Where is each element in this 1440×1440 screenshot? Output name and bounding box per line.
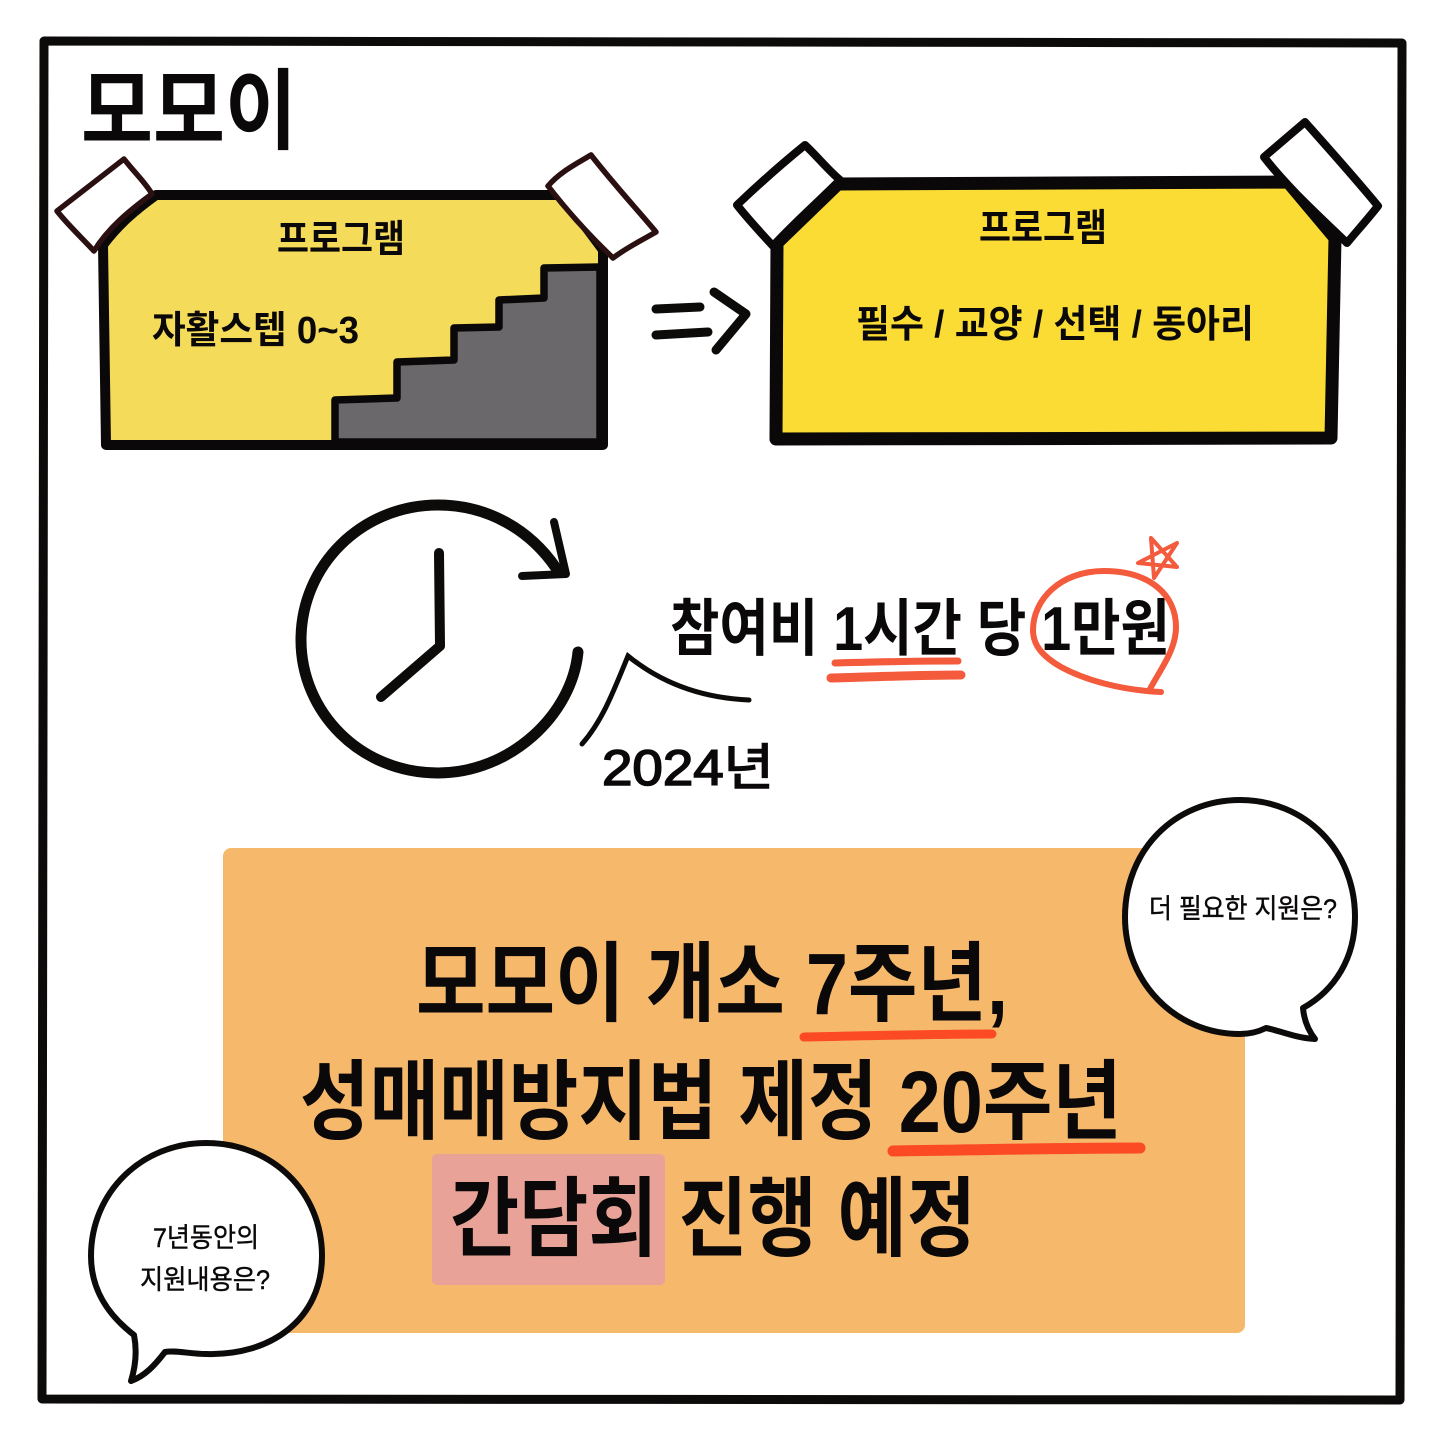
panel: program before — [57, 155, 656, 445]
headline line 3: 간담회 진행 예정 — [450, 1171, 976, 1268]
yellow note — [103, 195, 603, 445]
text: year 2024: 2024년 — [602, 740, 774, 796]
highlight: meeting — [432, 1154, 665, 1285]
text: self-support steps: 자활스텝 0~3 — [152, 310, 359, 352]
headline underlines — [804, 1034, 1140, 1151]
title: 모모이 — [81, 62, 297, 161]
heading: program: 프로그램 — [979, 208, 1107, 250]
callout line to year — [582, 656, 749, 744]
text: fee: 참여비 1시간 당 1만원 — [670, 595, 1170, 664]
text: categories: 필수 / 교양 / 선택 / 동아리 — [856, 304, 1254, 346]
headline — [300, 936, 1122, 1268]
fee emphasis marks — [831, 538, 1177, 692]
stairs — [335, 267, 600, 442]
icon: clock with arrow — [301, 505, 578, 773]
tape right — [548, 155, 656, 258]
bubble text: 7년동안의 — [153, 1223, 259, 1253]
speech bubble: top right — [1125, 800, 1355, 1039]
heading: program: 프로그램 — [277, 219, 405, 261]
headline line 2: 성매매방지법 제정 20주년 — [300, 1054, 1122, 1151]
tape left — [57, 159, 152, 251]
tape left — [737, 145, 840, 246]
panel: anniversary banner — [223, 848, 1245, 1333]
yellow note — [776, 182, 1335, 439]
tape right — [1264, 122, 1378, 243]
arrow: between panels — [656, 292, 746, 350]
bubble text: 지원내용은? — [140, 1265, 270, 1295]
headline line 1: 모모이 개소 7주년, — [416, 936, 1008, 1033]
speech bubble: bottom left — [91, 1143, 322, 1381]
panel: program after — [737, 122, 1378, 439]
bubble text: 더 필요한 지원은? — [1149, 894, 1337, 924]
